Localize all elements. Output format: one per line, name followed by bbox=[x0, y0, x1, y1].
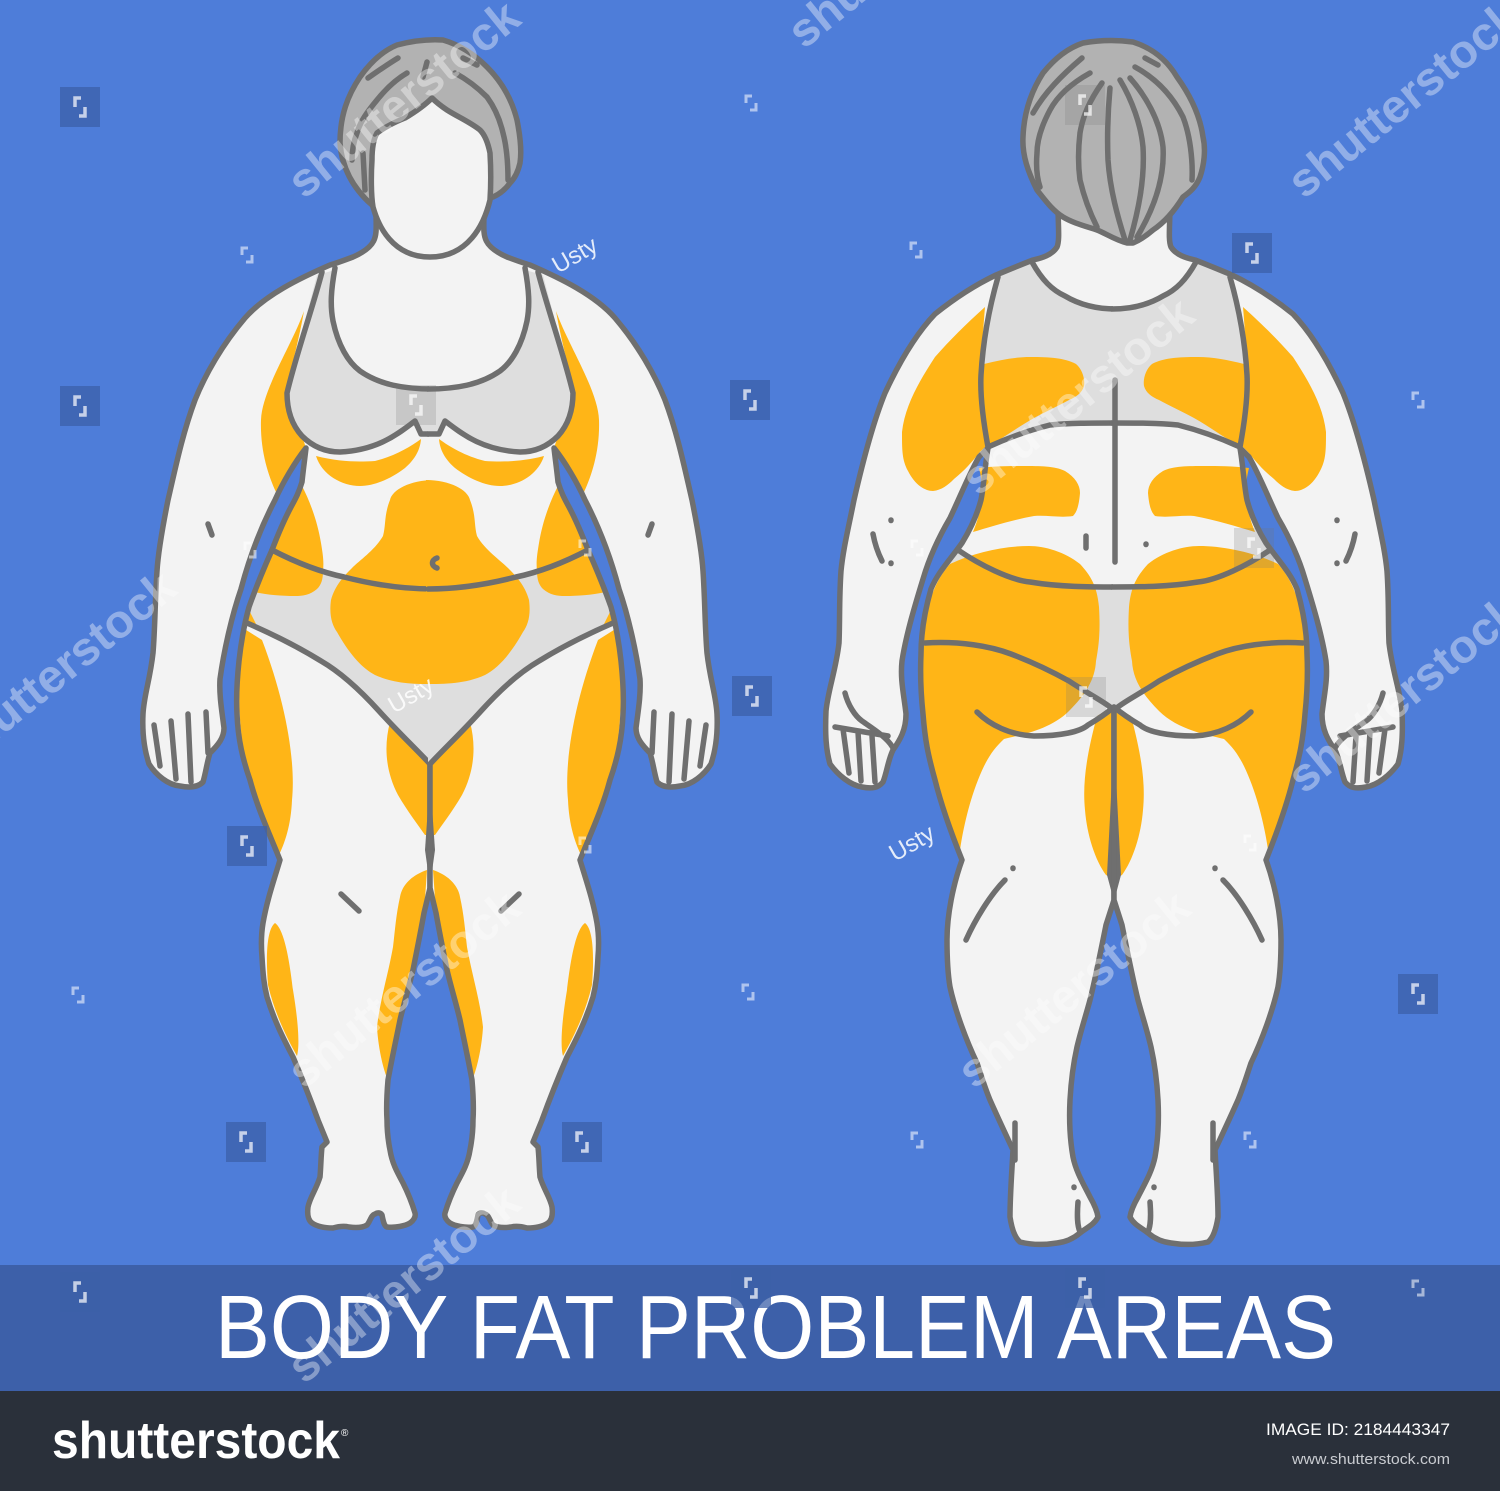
watermark text: shutterstock bbox=[277, 1174, 530, 1393]
image id: IMAGE ID: 2184443347 bbox=[1266, 1420, 1450, 1439]
knee crease bbox=[966, 868, 1013, 940]
buttock crease bbox=[977, 707, 1114, 736]
watermark text: shutterstock bbox=[951, 286, 1204, 505]
watermark text: shutterstock bbox=[277, 879, 530, 1098]
foot lines bbox=[1015, 1123, 1080, 1232]
outline bbox=[826, 205, 1114, 1244]
yellow: inner knee bbox=[377, 870, 427, 1078]
yellow: outer thigh bbox=[239, 628, 293, 857]
author tags bbox=[384, 232, 940, 867]
leg seam taper bbox=[1107, 720, 1115, 905]
yellow: waist side bbox=[254, 484, 323, 596]
hand lines bbox=[835, 693, 893, 782]
front body right half bbox=[426, 212, 717, 1228]
footer logo: shutterstock bbox=[52, 1412, 340, 1470]
yellow: upper back bbox=[983, 357, 1084, 445]
panties lines bbox=[247, 550, 432, 764]
back hair bbox=[1023, 41, 1204, 243]
crotch seam taper bbox=[425, 764, 431, 893]
back body right half bbox=[1112, 205, 1402, 1244]
panties fill bbox=[925, 550, 1116, 707]
front hair bbox=[340, 40, 521, 205]
panties lines bbox=[925, 550, 1116, 710]
title: BODY FAT PROBLEM AREAS bbox=[215, 1278, 1336, 1378]
front face bbox=[371, 98, 491, 257]
figure: front view bbox=[143, 40, 717, 1228]
author tags: Usty bbox=[548, 232, 603, 279]
yellow: outer knee bbox=[267, 923, 298, 1056]
top fill bbox=[981, 262, 1116, 445]
yellow: under bust bbox=[316, 439, 421, 486]
author tags: Usty bbox=[384, 672, 439, 719]
bra lines bbox=[287, 268, 432, 452]
footer bar bbox=[0, 1391, 1500, 1491]
lower back marks bbox=[1086, 536, 1146, 548]
registered mark: ® bbox=[341, 1428, 349, 1439]
yellow: small hip bbox=[245, 610, 258, 628]
top lines bbox=[981, 262, 1116, 447]
watermark icons bbox=[60, 85, 1438, 1312]
yellow: side of bust bbox=[261, 311, 306, 492]
title banner bbox=[0, 1265, 1500, 1391]
arm marks bbox=[873, 520, 891, 564]
yellow: hip, buttock and thigh bbox=[922, 546, 1100, 850]
elbow mark bbox=[208, 524, 212, 535]
panties fill bbox=[247, 550, 432, 766]
yellow: inner upper thigh bbox=[386, 722, 431, 835]
bra fill bbox=[287, 270, 432, 452]
watermark text: shutterstock bbox=[947, 879, 1200, 1098]
belly button bbox=[432, 558, 437, 568]
website: www.shutterstock.com bbox=[1291, 1451, 1450, 1468]
yellow: mid back bbox=[973, 466, 1080, 532]
knee mark bbox=[341, 894, 359, 911]
author tags: Usty bbox=[884, 820, 940, 867]
back body left half bbox=[826, 205, 1116, 1244]
finger lines bbox=[154, 712, 208, 782]
front body left half bbox=[143, 212, 434, 1228]
yellow: inner back thigh bbox=[1084, 705, 1115, 880]
yellow: belly bbox=[330, 480, 434, 684]
spine line bbox=[1112, 380, 1118, 562]
outline bbox=[143, 212, 430, 1228]
yellow: back of arm bbox=[902, 307, 987, 491]
figure: back view bbox=[826, 41, 1402, 1244]
